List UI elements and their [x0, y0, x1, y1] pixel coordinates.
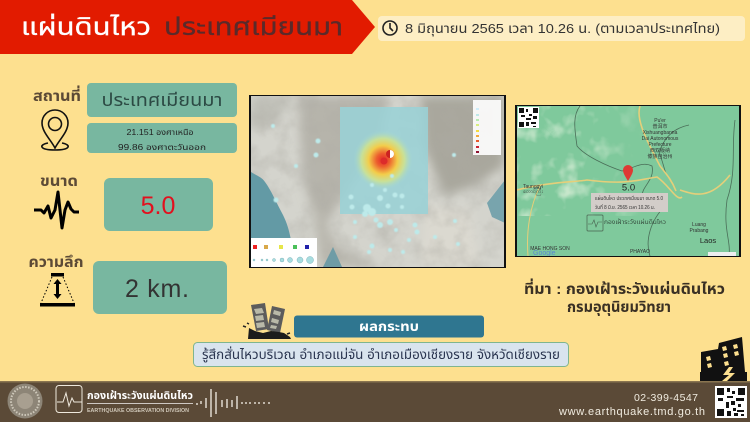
date and time bar	[378, 16, 745, 41]
icon: seismograph	[34, 192, 79, 228]
text block: impact details	[194, 342, 568, 366]
division name in English: EARTHQUAKE OBSERVATION DIVISION	[87, 408, 189, 414]
footer bar	[0, 381, 750, 422]
map: epicentre location: Luang	[692, 222, 706, 228]
map: epicentre location: Dai Autonomous	[642, 136, 679, 142]
logo: department seal	[8, 384, 42, 418]
icon: map pin	[42, 110, 68, 150]
map: epicentre location: 普洱市	[652, 123, 668, 130]
map: epicentre location: MAE HONG SON	[530, 246, 570, 252]
map magnitude value: 5.0	[622, 182, 635, 194]
panel: coordinates	[87, 123, 237, 153]
map: epicentre location: Prefecture	[648, 142, 672, 148]
logo: division mark	[56, 386, 82, 412]
label: depth: ความลึก	[28, 254, 84, 271]
map info box	[591, 193, 668, 212]
panel: coordinates: 99.86 องศาตะวันออก	[118, 143, 206, 152]
map info box: วันที่ 8 มิ.ย. 2565 เวลา 10.26 น.	[595, 203, 655, 211]
icon: QR code	[518, 107, 539, 128]
heading: impact	[294, 316, 484, 338]
panel: coordinates: 21.151 องศาเหนือ	[126, 127, 194, 137]
source credit: ที่มา : กองเฝ้าระวังแผ่นดินไหว	[524, 278, 725, 298]
label: location: สถานที่	[33, 85, 81, 105]
map: epicentre location: Xishuangbanna	[643, 130, 678, 136]
map: epicentre location: Laos	[700, 236, 716, 245]
map: epicentre location: 傣族自治州	[647, 153, 673, 160]
source credit: กรมอุตุนิยมวิทยา	[567, 299, 671, 316]
icon: epicentre pin	[623, 165, 633, 181]
map legend	[251, 238, 317, 267]
title banner: แผ่นดินไหว	[21, 13, 151, 41]
map watermark: กองเฝ้าระวังแผ่นดินไหว	[604, 217, 666, 226]
text block: impact details: รู้สึกสั่นไหวบริเวณ อำเภอแม่จัน อำเภอเมืองเชียงราย จังหวัดเชียงราย	[202, 346, 560, 362]
panel: magnitude value: 5.0	[141, 192, 175, 220]
map: epicentre location: PHAYAO	[630, 249, 650, 255]
panel: location name	[87, 83, 237, 117]
icon: damaged building	[700, 337, 747, 381]
title banner: ประเทศเมียนมา	[164, 13, 343, 41]
map: shake intensity	[249, 95, 506, 268]
map: epicentre location	[515, 105, 741, 257]
map watermark	[587, 215, 666, 231]
map: epicentre location: တောင်ကြီး	[523, 188, 543, 195]
division name: กองเฝ้าระวังแผ่นดินไหว	[87, 389, 193, 402]
panel: depth value: 2 km.	[125, 275, 189, 303]
icon: depth arrow	[40, 273, 75, 306]
source credit	[524, 278, 725, 316]
map info box: แผ่นดินไหว ประเทศเมียนมา ขนาด 5.0	[595, 195, 663, 202]
map: epicentre location: 西双版纳	[650, 147, 670, 154]
panel: depth value	[93, 261, 227, 314]
icon: clock	[383, 21, 397, 35]
contact phone: 02-399-4547	[634, 392, 698, 404]
contact website: www.earthquake.tmd.go.th	[558, 406, 705, 418]
panel: magnitude value	[104, 178, 213, 231]
decorative sound wave	[197, 389, 269, 417]
map: epicentre location: Pu'er	[654, 118, 666, 124]
map: epicentre location: Prabang	[690, 228, 709, 234]
icon: collapsing buildings	[243, 303, 291, 339]
title banner	[0, 0, 375, 54]
map: epicentre location: Taunggyi	[523, 184, 543, 190]
date and time text: 8 มิถุนายน 2565 เวลา 10.26 น. (ตามเวลาประเทศไทย)	[405, 21, 720, 36]
panel: location name: ประเทศเมียนมา	[102, 90, 222, 110]
map: epicentre location: Google	[533, 250, 556, 257]
heading: impact: ผลกระทบ	[359, 319, 419, 334]
label: magnitude: ขนาด	[40, 173, 78, 190]
icon: footer QR code	[715, 386, 747, 418]
